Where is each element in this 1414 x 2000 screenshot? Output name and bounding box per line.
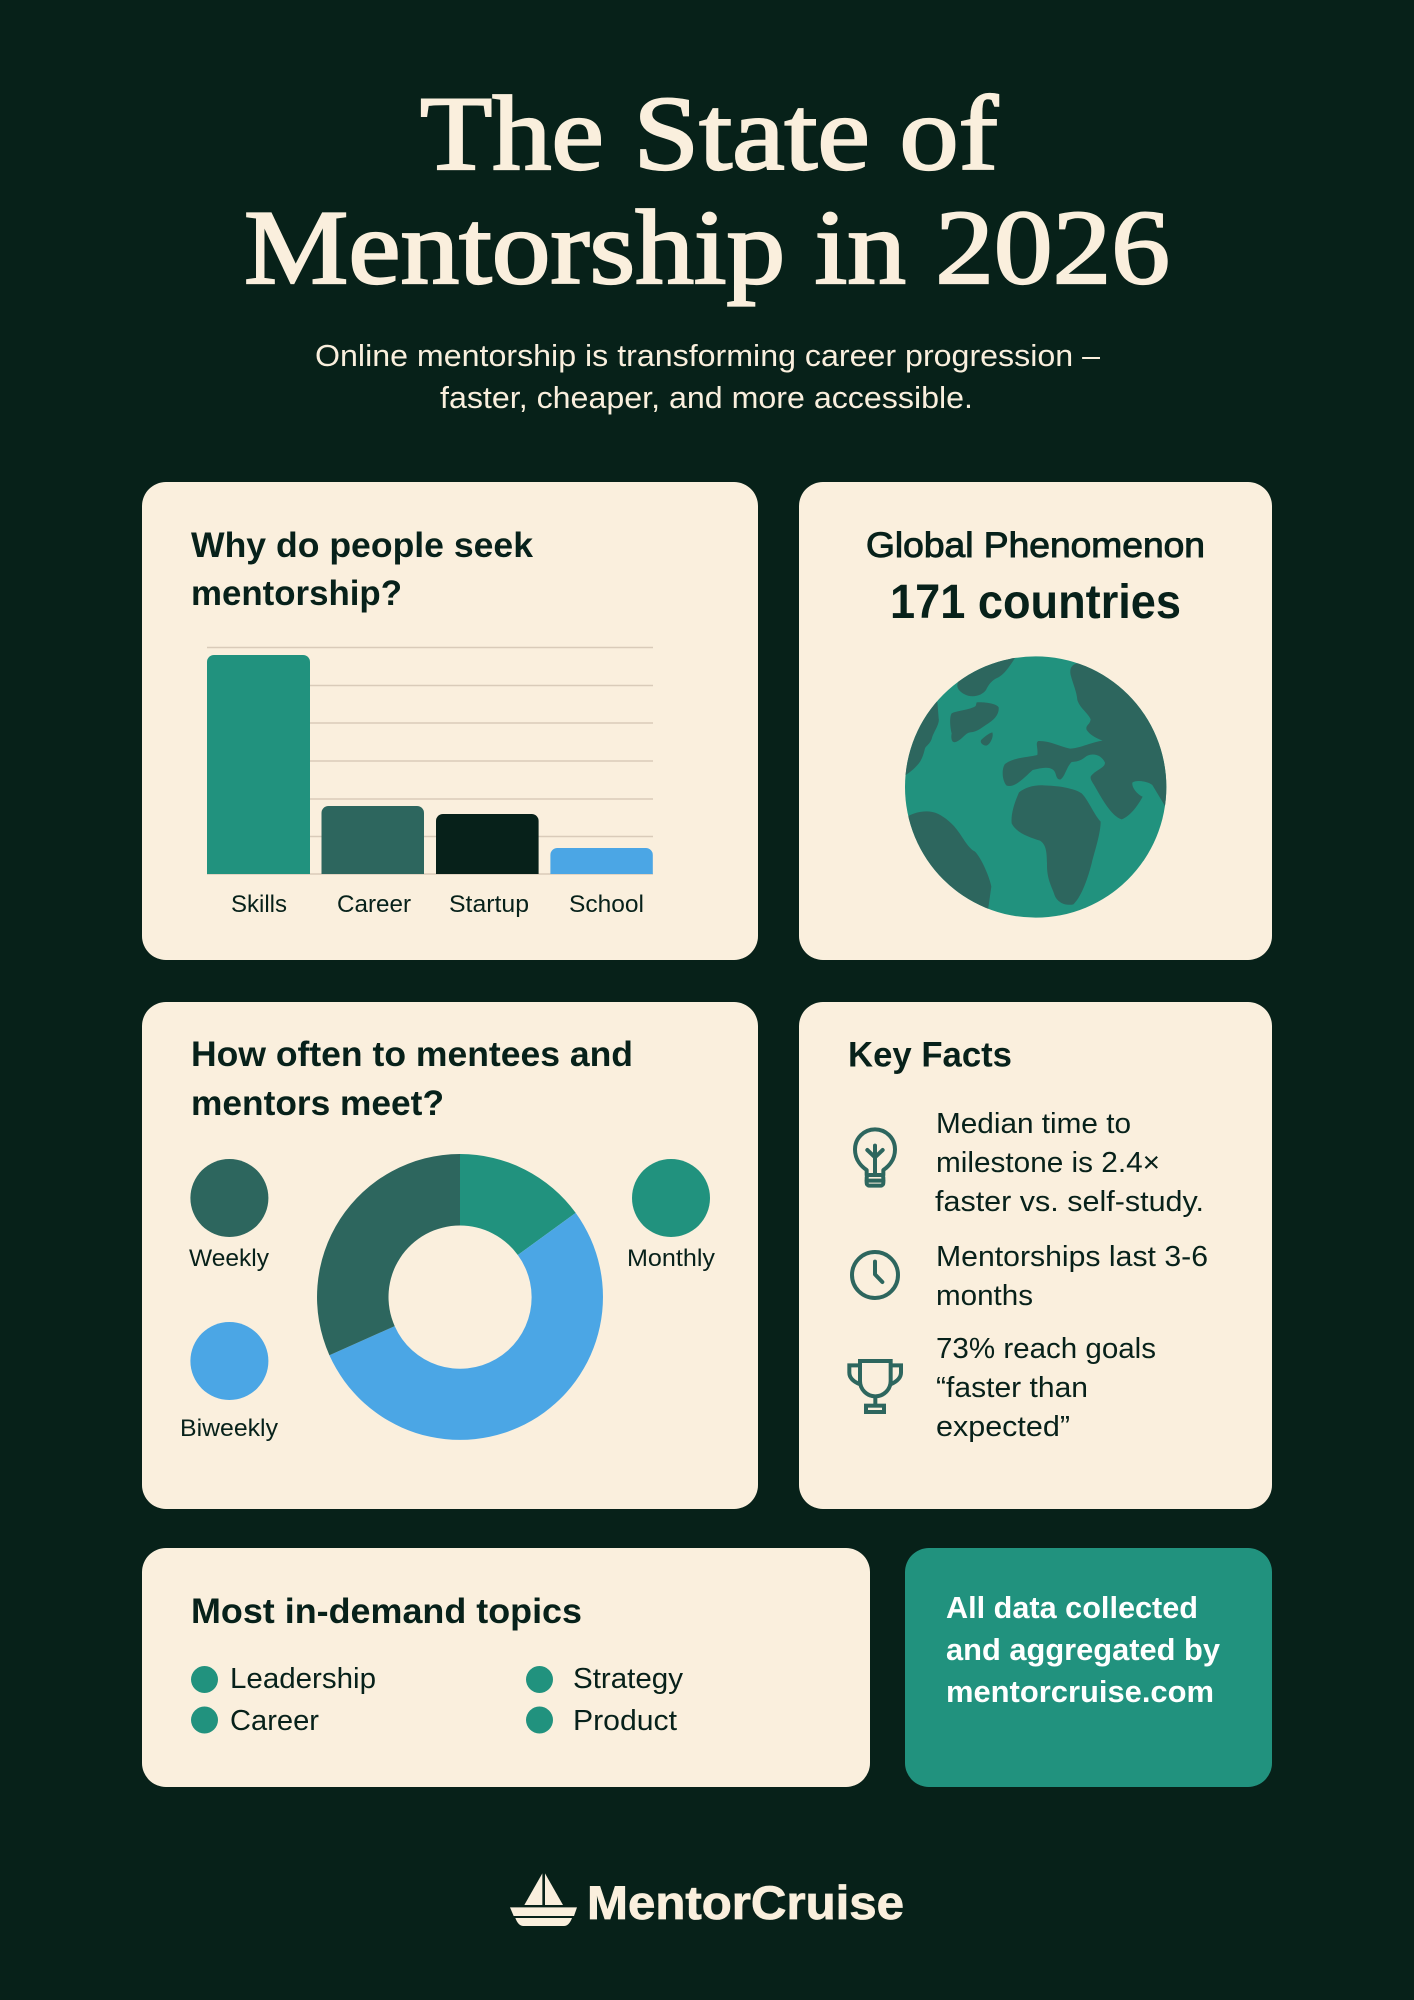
panel: most in-demand topics <box>142 1548 870 1787</box>
bar labels: Career <box>337 891 411 918</box>
subtitle: faster, cheaper, and more accessible. <box>440 380 973 415</box>
icon: clock <box>852 1252 898 1298</box>
icon: trophy <box>849 1361 901 1412</box>
bar: career <box>322 806 424 874</box>
text: median time: milestone is 2.4× <box>936 1147 1160 1179</box>
heading: how often to mentees and mentors meet: mentors meet? <box>191 1083 444 1123</box>
bar labels <box>231 891 644 918</box>
heading: most in-demand topics: Most in-demand topics <box>191 1591 582 1631</box>
panel: global phenomenon <box>799 482 1272 960</box>
bar labels: School <box>569 891 644 918</box>
topic: career: Career <box>230 1705 319 1737</box>
topic: product: Product <box>573 1705 677 1737</box>
subtitle: Online mentorship is transforming career progression – <box>315 338 1101 373</box>
panel: how often mentees and mentors meet <box>142 1002 758 1509</box>
text: mentorships last: months <box>936 1280 1033 1312</box>
text: 73 percent reach goals <box>936 1333 1156 1443</box>
text: 73 percent reach goals: expected” <box>936 1411 1070 1443</box>
donut chart <box>317 1154 603 1440</box>
topic: product <box>526 1705 677 1737</box>
legend: biweekly: Biweekly <box>180 1415 278 1442</box>
heading: why do people seek mentorship <box>191 525 533 613</box>
topic: career <box>191 1705 319 1737</box>
text: mentorships last: Mentorships last 3-6 <box>936 1241 1208 1273</box>
heading: key facts: Key Facts <box>848 1034 1012 1074</box>
text: median time <box>935 1108 1204 1218</box>
text: data source: and aggregated by <box>946 1633 1220 1667</box>
text: data source <box>946 1591 1220 1709</box>
text: 73 percent reach goals: 73% reach goals <box>936 1333 1156 1365</box>
heading: how often to mentees and mentors meet: How often to mentees and <box>191 1034 633 1074</box>
topic: strategy: Strategy <box>573 1663 684 1695</box>
legend: weekly: Weekly <box>189 1245 269 1272</box>
heading: why do people seek mentorship: mentorship? <box>191 573 402 613</box>
text: median time: Median time to <box>936 1108 1131 1140</box>
stat: 171 countries: 171 countries <box>890 576 1181 629</box>
title: Mentorship in 2026 <box>244 189 1170 306</box>
text: data source: mentorcruise.com <box>946 1675 1214 1709</box>
icon: sailboat <box>510 1873 577 1926</box>
text: mentorships last <box>936 1241 1208 1312</box>
text: 73 percent reach goals: “faster than <box>936 1372 1088 1404</box>
title <box>244 75 1170 306</box>
bar: startup <box>436 814 539 874</box>
title: The State of <box>420 75 999 192</box>
bar labels: Startup <box>449 891 529 918</box>
icon: lightbulb <box>855 1129 895 1186</box>
bar chart <box>207 648 653 918</box>
heading: global phenomenon: Global Phenomenon <box>866 525 1205 565</box>
icon: globe <box>893 653 1180 918</box>
text: median time: faster vs. self-study. <box>935 1186 1204 1218</box>
topic: strategy <box>526 1663 684 1695</box>
heading: why do people seek mentorship: Why do people seek <box>191 525 533 565</box>
panel: data source callout <box>905 1548 1272 1787</box>
segment: weekly <box>317 1154 460 1355</box>
text: data source: All data collected <box>946 1591 1198 1625</box>
segment: monthly <box>460 1154 576 1255</box>
panel: key facts <box>799 1002 1272 1509</box>
legend: monthly: Monthly <box>627 1245 715 1272</box>
bar: skills <box>207 655 310 874</box>
segment: biweekly <box>329 1213 603 1440</box>
legend: monthly <box>627 1159 715 1272</box>
logo: MentorCruise: MentorCruise <box>587 1876 904 1929</box>
legend: biweekly <box>180 1322 278 1442</box>
bar labels: Skills <box>231 891 287 918</box>
panel: why do people seek mentorship <box>142 482 758 960</box>
topic: leadership: Leadership <box>230 1663 376 1695</box>
subtitle <box>315 338 1101 415</box>
bar: school <box>550 848 653 874</box>
heading: how often to mentees and mentors meet <box>191 1034 633 1123</box>
legend: weekly <box>189 1159 269 1272</box>
